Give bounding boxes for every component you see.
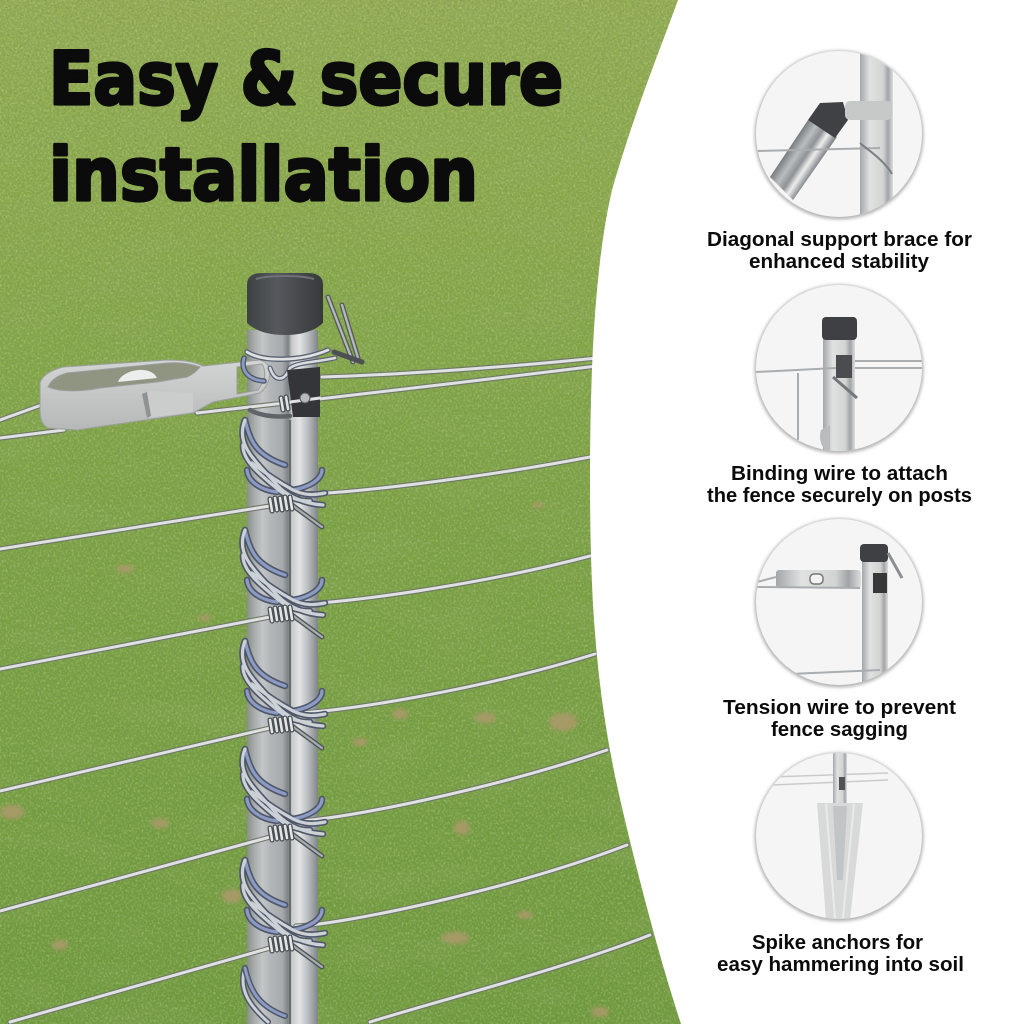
icon: tensioner detail circle <box>754 518 924 695</box>
caption: diagonal support brace: Diagonal support brace for <box>707 229 972 251</box>
fence wires <box>0 358 650 1022</box>
caption: binding wire <box>707 463 972 507</box>
title <box>49 37 563 218</box>
wire tensioner on top wire <box>40 360 270 430</box>
binding wire coils on post <box>242 420 325 1022</box>
panel: diagonal support brace <box>707 40 972 273</box>
fence post with cap <box>247 273 323 1024</box>
title: Easy & secure <box>49 37 563 122</box>
caption: tension wire: fence sagging <box>771 719 908 741</box>
title: installation <box>49 133 478 218</box>
caption: binding wire: Binding wire to attach <box>731 463 948 485</box>
top wire wraps and black bracket <box>243 297 362 417</box>
caption: diagonal support brace <box>707 229 972 273</box>
panel: tension wire <box>723 518 956 741</box>
icon: spike anchor detail circle <box>754 750 924 922</box>
panel: spike anchors <box>717 750 964 976</box>
caption: diagonal support brace: enhanced stability <box>749 251 930 273</box>
caption: tension wire: Tension wire to prevent <box>723 697 956 719</box>
caption: spike anchors <box>717 932 964 976</box>
panel: binding wire <box>707 284 972 507</box>
caption: tension wire <box>723 697 956 741</box>
caption: spike anchors: easy hammering into soil <box>717 954 964 976</box>
icon: binding wire detail circle <box>754 284 925 458</box>
icon: brace detail circle <box>754 40 924 230</box>
caption: binding wire: the fence securely on posts <box>707 485 972 507</box>
caption: spike anchors: Spike anchors for <box>752 932 923 954</box>
white side panel <box>590 0 1024 1024</box>
